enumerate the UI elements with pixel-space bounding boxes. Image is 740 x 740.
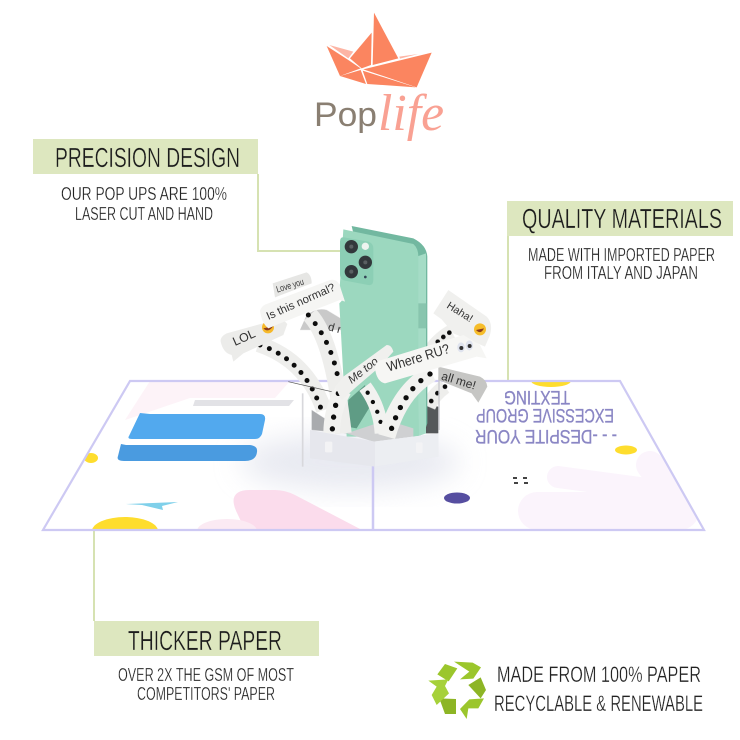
- bubble: call me: all me!: [440, 369, 478, 393]
- logo wordmark: Pop: [314, 96, 377, 134]
- bubble: haha: Haha!: [444, 300, 475, 325]
- flipped card message: - - -DESPITE YOUR: [475, 425, 617, 446]
- recyclable note: [494, 662, 703, 716]
- bubble: me too: Me too: [346, 356, 381, 386]
- bubble: LOL: [221, 320, 287, 362]
- icon: paper boat: [327, 13, 432, 87]
- gray message bar: [193, 400, 294, 406]
- logo wordmark: life: [378, 85, 444, 142]
- icon: recycling arrows: [428, 662, 486, 719]
- ribbon: me too left: [332, 390, 343, 433]
- ribbon: where RU: [387, 373, 432, 437]
- inner floor of base: [347, 420, 413, 442]
- callout: thicker paper: OVER 2X THE GSM OF MOST: [118, 665, 294, 685]
- flipped card message: [475, 386, 617, 446]
- callout: thicker paper: [94, 621, 319, 704]
- bubble: hidden gray: [300, 309, 345, 337]
- card paper and decoration: [85, 382, 696, 529]
- flipped card message: EXCESSIVE GROUP: [476, 404, 614, 425]
- bubble: call me: [438, 367, 487, 403]
- callout: thicker paper: COMPETITORS' PAPER: [137, 684, 275, 704]
- bubble: hidden gray: d n: [327, 321, 345, 337]
- callout: precision design: [33, 139, 258, 224]
- callout: precision design: PRECISION DESIGN: [55, 142, 240, 173]
- back ribbon: call me: [428, 387, 445, 407]
- pop-up base: [288, 377, 439, 467]
- bubble: love you: Love you: [275, 277, 305, 295]
- bubble: is this normal: Is this normal?: [265, 282, 337, 323]
- connector lines: [94, 174, 508, 621]
- shadow under the pop-up: [240, 434, 460, 490]
- ribbon: is this normal: [310, 315, 343, 433]
- ribbon: me too right: [365, 387, 382, 433]
- back ribbon: haha: [427, 332, 452, 357]
- callout: precision design: OUR POP UPS ARE 100%: [61, 184, 227, 204]
- bubble: LOL: LOL: [231, 326, 258, 349]
- callout: thicker paper: THICKER PAPER: [128, 625, 282, 656]
- phone: [339, 226, 427, 437]
- logo: [314, 13, 444, 142]
- open card: [41, 380, 706, 532]
- pop-up phone and message bubbles: [221, 226, 491, 467]
- blue message bubbles: [128, 413, 265, 439]
- flipped card message: TEXTING: [504, 386, 570, 407]
- camera module: [340, 237, 373, 285]
- back walls of base: [312, 410, 347, 433]
- ribbon: LOL: [258, 344, 324, 410]
- bubble: haha: [433, 290, 491, 347]
- logo wordmark: [314, 85, 444, 142]
- bubble: where RU: [375, 335, 487, 383]
- paper plane: [126, 502, 178, 510]
- bubble: me too: [335, 345, 393, 400]
- bubble: where RU: Where RU?: [385, 341, 452, 375]
- callout: quality materials: [507, 201, 733, 283]
- callout: precision design: LASER CUT AND HAND: [75, 204, 213, 224]
